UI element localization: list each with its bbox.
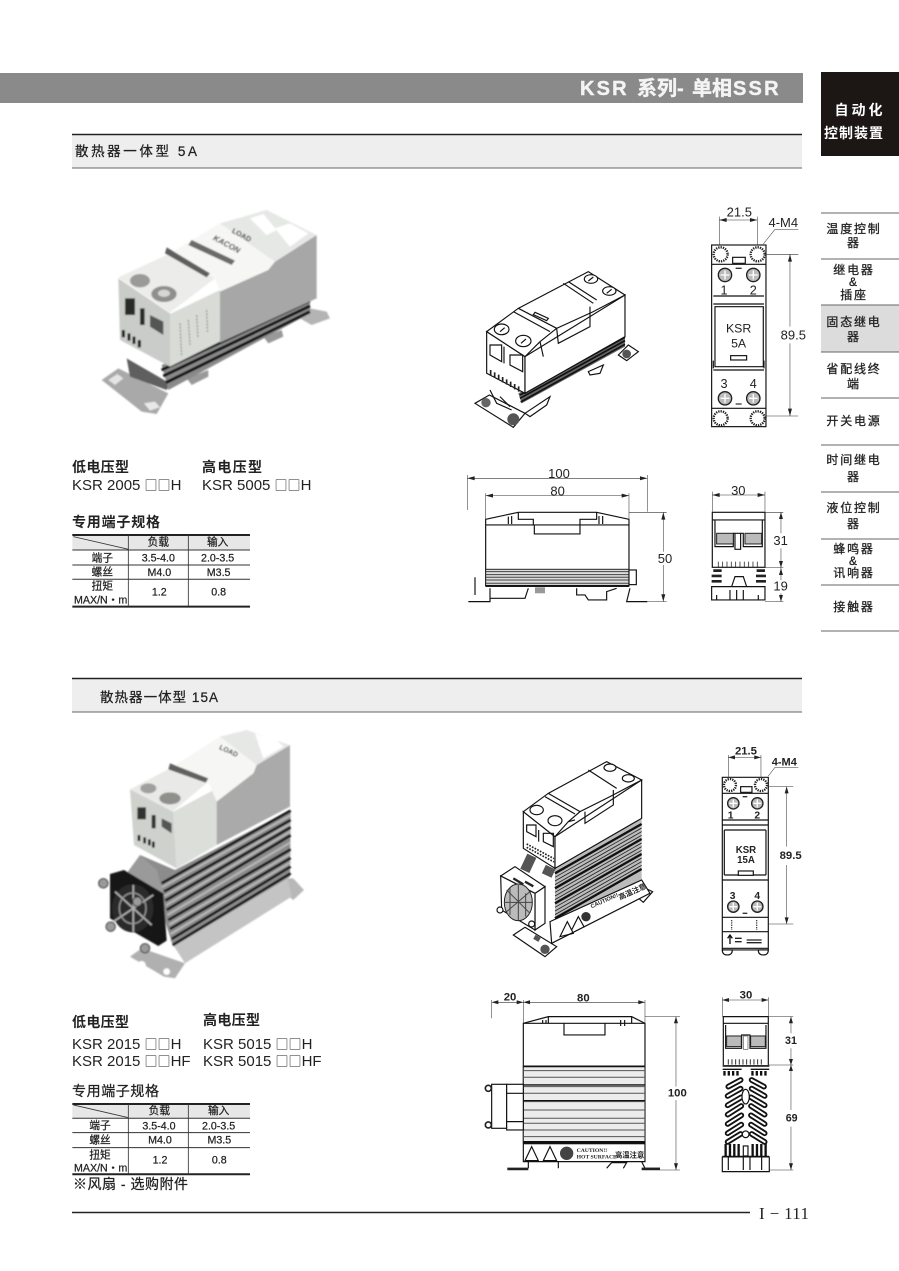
- top view drawing: 15A: 3: [730, 891, 736, 902]
- dimensions: side view 15A: 20: [504, 991, 516, 1003]
- section heading: 15A: [72, 678, 802, 712]
- sidebar navigation: [821, 213, 899, 631]
- dimensions: side view 5A: 80: [550, 483, 565, 498]
- dimensions: top view 15A: 4-M4: [772, 757, 798, 769]
- low voltage model label: 15A: KSR 2015 □□H: [72, 1034, 181, 1053]
- dimensions: side view 5A: 100: [548, 466, 570, 481]
- isometric drawing: 5A: [475, 272, 638, 427]
- terminal table: 5A: 0.8: [211, 587, 226, 599]
- dimensions: side view 15A: [492, 991, 687, 1170]
- title banner: KSR: [580, 78, 629, 100]
- terminal table: 15A: M3.5: [207, 1135, 231, 1147]
- sidebar category tab: 自动化: [834, 102, 886, 118]
- sidebar navigation: 继电器: [833, 263, 875, 277]
- dimensions: end view 5A: 30: [731, 483, 746, 498]
- isometric drawing: 15A with fan: CAUTION!!: [590, 893, 620, 910]
- top view drawing: 15A: 4: [754, 891, 760, 902]
- low voltage model label: [72, 459, 181, 494]
- product photo: 5A relay: KACON: [212, 233, 242, 255]
- end view drawing: 15A heat sink profile: [722, 1017, 769, 1172]
- product photo: 15A relay with fan: [99, 730, 304, 978]
- dimensions: top view 15A: 89.5: [780, 850, 802, 862]
- title banner: 系列: [637, 77, 677, 100]
- terminal table: 15A: M4.0: [148, 1135, 172, 1147]
- terminal table heading: 5A: 专用端子规格: [72, 514, 160, 530]
- sidebar category tab: 控制装置: [824, 125, 884, 141]
- high voltage model label: 15A: 高电压型: [203, 1012, 260, 1028]
- dimensions: side view 5A: 50: [658, 551, 672, 566]
- dimensions: top view 5A: 4-M4: [769, 215, 798, 230]
- high voltage model label: KSR 5005 □□H: [202, 475, 311, 494]
- dimensions: end view 5A: 19: [773, 578, 788, 593]
- terminal table: 5A: [72, 535, 250, 607]
- top view drawing: 5A: 5A: [731, 336, 747, 350]
- side view drawing: 15A: CAUTION!!: [577, 1148, 607, 1154]
- terminal table: 5A: 负载: [148, 536, 169, 549]
- isometric drawing: 15A with fan: [497, 762, 653, 957]
- side view drawing: 15A: HOT SURFACE: [577, 1155, 617, 1161]
- title banner: SSR: [733, 78, 781, 100]
- terminal table: 5A: M3.5: [207, 567, 231, 579]
- sidebar navigation: 器: [847, 517, 859, 531]
- sidebar navigation: 开关电源: [826, 414, 882, 428]
- dimensions: side view 5A: [467, 466, 672, 602]
- sidebar navigation: 器: [847, 236, 859, 250]
- sidebar navigation: 时间继电: [826, 453, 882, 467]
- dimensions: end view 5A: [712, 483, 788, 602]
- terminal table: 5A: 螺丝: [92, 567, 113, 579]
- low voltage model label: KSR 2005 □□H: [72, 475, 181, 494]
- product photo: 5A relay: LOAD: [230, 226, 253, 244]
- sidebar navigation: 器: [847, 330, 859, 344]
- end view drawing: 5A: [712, 512, 766, 600]
- sidebar navigation: 讯响器: [833, 565, 875, 580]
- terminal table: 15A: MAX/N・m: [74, 1163, 127, 1175]
- high voltage model label: 高电压型: [202, 459, 262, 475]
- section heading: 15A: 散热器一体型 15A: [100, 690, 218, 705]
- terminal table: 15A: 3.5-4.0: [142, 1120, 176, 1132]
- terminal table: 15A: 螺丝: [89, 1135, 111, 1147]
- terminal table heading: 15A: 专用端子规格: [72, 1083, 159, 1099]
- top view drawing: 5A: KSR: [726, 321, 751, 335]
- dimensions: end view 15A: [722, 990, 798, 1170]
- dimensions: end view 5A: 31: [773, 533, 788, 548]
- top view drawing: 15A: 1: [728, 810, 734, 821]
- terminal table: 5A: MAX/N・m: [74, 595, 127, 607]
- product photo: 15A relay with fan: LOAD: [218, 744, 239, 759]
- top view drawing: 5A: 1: [720, 284, 727, 298]
- terminal table: 15A: 扭矩: [89, 1148, 111, 1161]
- side view drawing: 15A: 高温注意: [615, 1150, 644, 1159]
- top view drawing: 15A: KSR: [736, 845, 756, 856]
- sidebar navigation: &: [849, 275, 857, 289]
- dimensions: end view 15A: 31: [785, 1035, 797, 1047]
- top view drawing: 15A: 2: [754, 810, 760, 821]
- high voltage model label: 15A: KSR 5015 □□H: [203, 1034, 312, 1053]
- terminal table: 15A: 0.8: [212, 1155, 227, 1167]
- top view drawing: 5A: 4: [750, 377, 757, 391]
- footnote: optional fan: ※风扇 - 选购附件: [73, 1176, 188, 1192]
- terminal table: 5A: 扭矩: [92, 580, 113, 593]
- terminal table: 5A: 2.0-3.5: [201, 553, 234, 565]
- terminal table: 15A: 1.2: [153, 1155, 167, 1167]
- sidebar navigation: 接触器: [833, 599, 875, 614]
- sidebar navigation: 插座: [840, 287, 868, 302]
- top view drawing: 15A: 15A: [737, 855, 755, 866]
- terminal table: 5A: 3.5-4.0: [142, 553, 175, 565]
- terminal table: 5A: 1.2: [152, 587, 167, 599]
- terminal table: 15A: 负载: [149, 1104, 170, 1117]
- terminal table: 15A: 2.0-3.5: [202, 1120, 235, 1132]
- terminal table: 15A: 端子: [89, 1119, 111, 1132]
- sidebar navigation: 温度控制: [826, 221, 882, 236]
- page number: I − 111: [759, 1204, 809, 1223]
- low voltage model label: 15A: [72, 1014, 191, 1070]
- terminal table: 5A: 输入: [207, 536, 229, 549]
- dimensions: end view 15A: 69: [786, 1112, 798, 1124]
- dimensions: top view 5A: [719, 204, 806, 416]
- isometric drawing: 15A with fan: 高温注意: [617, 882, 648, 902]
- terminal table: 5A: M4.0: [147, 567, 171, 579]
- dimensions: side view 15A: 80: [577, 992, 590, 1004]
- sidebar navigation: 液位控制: [826, 500, 882, 515]
- side view drawing: 15A: [485, 1017, 660, 1169]
- sidebar navigation: 省配线终: [826, 361, 882, 376]
- top view drawing: 5A: 3: [720, 377, 727, 391]
- sidebar navigation: 端: [847, 377, 859, 391]
- sidebar navigation: 固态继电: [826, 315, 882, 329]
- top view drawing: 15A: [722, 777, 768, 955]
- sidebar navigation: 器: [847, 470, 859, 484]
- high voltage model label: 15A: KSR 5015 □□HF: [203, 1051, 322, 1070]
- section heading: 5A: 散热器一体型 5A: [75, 144, 197, 159]
- top view drawing: 5A: [712, 245, 766, 427]
- sidebar navigation: 蜂鸣器: [833, 541, 875, 556]
- dimensions: top view 5A: 89.5: [781, 327, 806, 342]
- footer rule: [72, 1212, 750, 1214]
- terminal table: 15A: 输入: [208, 1104, 230, 1117]
- high voltage model label: 15A: [203, 1012, 322, 1070]
- sidebar navigation: &: [849, 554, 857, 568]
- dimensions: side view 15A: 100: [668, 1087, 687, 1099]
- dimensions: top view 15A: 21.5: [735, 745, 757, 757]
- low voltage model label: 15A: 低电压型: [72, 1014, 129, 1030]
- terminal table: 5A: 端子: [92, 551, 113, 564]
- dimensions: end view 15A: 30: [740, 990, 752, 1002]
- high voltage model label: [202, 459, 311, 494]
- top view drawing: 5A: 2: [750, 284, 757, 298]
- terminal table: 15A: [72, 1104, 250, 1175]
- dimensions: top view 5A: 21.5: [727, 204, 752, 219]
- sidebar category tab: [821, 72, 899, 156]
- product photo: 5A relay: [102, 210, 330, 414]
- section heading: 5A: [72, 134, 802, 168]
- dimensions: top view 15A: [728, 745, 802, 924]
- low voltage model label: 15A: KSR 2015 □□HF: [72, 1051, 191, 1070]
- title banner: [0, 73, 803, 103]
- title banner: -: [677, 78, 684, 100]
- title banner: 单相: [692, 77, 732, 100]
- low voltage model label: 低电压型: [72, 459, 129, 475]
- side view drawing: 5A: [468, 512, 647, 602]
